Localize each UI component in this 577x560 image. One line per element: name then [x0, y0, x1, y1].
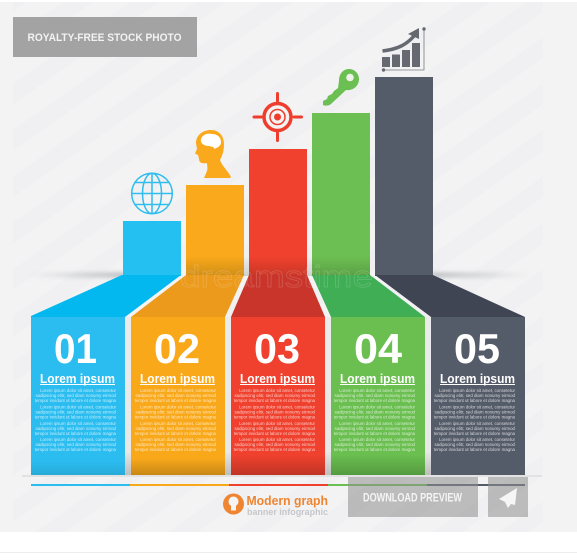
button: send: [488, 477, 528, 517]
body text 01: Lorem ipsum dolor sit amet, consetetur: [40, 421, 117, 426]
ribbon 1: [31, 275, 181, 317]
body text 01: tempor invidunt ut labore et dolore magna: [35, 447, 117, 452]
panel 04: [331, 317, 425, 475]
heading 03: Lorem ipsum: [240, 372, 315, 386]
body text 01: Lorem ipsum dolor sit amet, consetetur: [40, 404, 117, 410]
icon: target: [254, 94, 302, 140]
bar 2: [186, 185, 244, 276]
body text 05: sadipscing elitr, sed diam nonumy eirmod: [434, 442, 516, 447]
body text 02: tempor invidunt ut labore et dolore magna: [135, 398, 217, 403]
body text 03: sadipscing elitr, sed diam nonumy eirmod: [234, 410, 316, 414]
body text 04: [334, 388, 416, 452]
body text 04: Lorem ipsum dolor sit amet, consetetur: [339, 437, 416, 442]
heading 04: Lorem ipsum: [340, 372, 415, 386]
bar 5: [375, 77, 433, 276]
number 04: 04: [354, 325, 403, 372]
body text 05: tempor invidunt ut labore et dolore magna: [434, 431, 516, 436]
icon: paper plane: [499, 488, 517, 508]
ribbon 2: [131, 275, 244, 317]
perspective ribbons: [31, 275, 525, 317]
body text 01: sadipscing elitr, sed diam nonumy eirmod: [35, 442, 117, 447]
button: download preview: DOWNLOAD PREVIEW: [363, 490, 463, 504]
body text 05: [434, 388, 516, 452]
body text 05: tempor invidunt ut labore et dolore magna: [434, 447, 516, 452]
number 02: 02: [154, 325, 200, 372]
body text 03: Lorem ipsum dolor sit amet, consetetur: [239, 421, 316, 426]
step bars: [123, 77, 433, 276]
body text 03: tempor invidunt ut labore et dolore magna: [234, 414, 316, 420]
body text 01: sadipscing elitr, sed diam nonumy eirmod: [35, 410, 117, 414]
body text 04: sadipscing elitr, sed diam nonumy eirmod: [334, 426, 416, 431]
body text 03: sadipscing elitr, sed diam nonumy eirmod: [234, 442, 316, 447]
body text 05: Lorem ipsum dolor sit amet, consetetur: [439, 388, 516, 393]
icon: light bulb: [223, 494, 244, 514]
body text 02: tempor invidunt ut labore et dolore magna: [135, 414, 217, 420]
body text 05: tempor invidunt ut labore et dolore magna: [434, 414, 516, 420]
bar 1: [123, 221, 181, 276]
body text 04: Lorem ipsum dolor sit amet, consetetur: [339, 388, 416, 393]
ribbon 3: [231, 275, 325, 317]
number 03: 03: [254, 325, 300, 372]
body text 05: Lorem ipsum dolor sit amet, consetetur: [439, 437, 516, 442]
body text 01: [35, 388, 117, 452]
body text 04: Lorem ipsum dolor sit amet, consetetur: [339, 421, 416, 426]
body text 01: tempor invidunt ut labore et dolore magna: [35, 398, 117, 403]
body text 05: tempor invidunt ut labore et dolore magna: [434, 398, 516, 403]
panel gaps: [125, 317, 431, 475]
body text 03: Lorem ipsum dolor sit amet, consetetur: [239, 437, 316, 442]
body text 03: sadipscing elitr, sed diam nonumy eirmod: [234, 426, 316, 431]
watermark: dreamstime: [180, 259, 373, 294]
body text 01: sadipscing elitr, sed diam nonumy eirmod: [35, 426, 117, 431]
bar 4: [312, 113, 370, 276]
body text 02: Lorem ipsum dolor sit amet, consetetur: [140, 388, 217, 393]
number 01: 01: [54, 325, 97, 372]
ribbon 4: [312, 275, 425, 317]
heading 05: Lorem ipsum: [440, 372, 515, 386]
body text 02: [135, 388, 217, 452]
body text 01: Lorem ipsum dolor sit amet, consetetur: [40, 388, 117, 393]
body text 04: sadipscing elitr, sed diam nonumy eirmod: [334, 410, 416, 414]
body text 04: sadipscing elitr, sed diam nonumy eirmod: [334, 442, 416, 447]
body text 01: tempor invidunt ut labore et dolore magna: [35, 414, 117, 420]
body text 01: tempor invidunt ut labore et dolore magna: [35, 431, 117, 436]
body text 02: tempor invidunt ut labore et dolore magna: [135, 431, 217, 436]
badge: royalty-free: [13, 17, 197, 57]
floor shadows: [25, 273, 532, 277]
logo subtitle: banner infographic: [247, 507, 328, 517]
body text 05: Lorem ipsum dolor sit amet, consetetur: [439, 421, 516, 426]
icon: head with brain: [195, 130, 231, 178]
body text 04: sadipscing elitr, sed diam nonumy eirmod: [334, 393, 416, 398]
body text 04: tempor invidunt ut labore et dolore magna: [334, 447, 416, 452]
body text 03: tempor invidunt ut labore et dolore magna: [234, 398, 316, 403]
body text 03: tempor invidunt ut labore et dolore magna: [234, 431, 316, 436]
bar 3: [249, 149, 307, 276]
panel base shadow: [22, 475, 542, 477]
bar base shading: [186, 256, 370, 276]
body text 02: sadipscing elitr, sed diam nonumy eirmod: [135, 393, 217, 398]
body text 03: [234, 388, 316, 452]
panel 05: [431, 317, 525, 475]
body text 04: tempor invidunt ut labore et dolore magna: [334, 414, 416, 420]
ribbon 5: [375, 275, 525, 317]
body text 02: Lorem ipsum dolor sit amet, consetetur: [140, 404, 217, 410]
body text 02: sadipscing elitr, sed diam nonumy eirmod: [135, 442, 217, 447]
heading 02: Lorem ipsum: [140, 372, 215, 386]
heading 01: Lorem ipsum: [40, 372, 115, 386]
body text 03: Lorem ipsum dolor sit amet, consetetur: [239, 388, 316, 393]
body text 05: sadipscing elitr, sed diam nonumy eirmod: [434, 410, 516, 414]
body text 03: tempor invidunt ut labore et dolore magna: [234, 447, 316, 452]
icon: globe: [132, 173, 172, 214]
body text 01: Lorem ipsum dolor sit amet, consetetur: [40, 437, 117, 442]
body text 05: Lorem ipsum dolor sit amet, consetetur: [439, 404, 516, 410]
button: download preview: [348, 477, 478, 517]
panel 01: [31, 317, 125, 475]
body text 02: sadipscing elitr, sed diam nonumy eirmod: [135, 426, 217, 431]
logo title: Modern graph: [246, 493, 328, 508]
body text 01: sadipscing elitr, sed diam nonumy eirmod: [35, 393, 117, 398]
logo: [223, 493, 328, 517]
body text 02: sadipscing elitr, sed diam nonumy eirmod: [135, 410, 217, 414]
body text 03: sadipscing elitr, sed diam nonumy eirmod: [234, 393, 316, 398]
number 05: 05: [454, 325, 500, 372]
body text 04: tempor invidunt ut labore et dolore magna: [334, 431, 416, 436]
body text 02: Lorem ipsum dolor sit amet, consetetur: [140, 421, 217, 426]
colour rule: [31, 484, 525, 486]
body text 02: tempor invidunt ut labore et dolore magna: [135, 447, 217, 452]
panel 03: [231, 317, 325, 475]
body text 03: Lorem ipsum dolor sit amet, consetetur: [239, 404, 316, 410]
icon: key: [323, 69, 359, 106]
icon: growth chart: [382, 27, 426, 72]
body text 04: tempor invidunt ut labore et dolore magna: [334, 398, 416, 403]
body text 05: sadipscing elitr, sed diam nonumy eirmod: [434, 426, 516, 431]
body text 02: Lorem ipsum dolor sit amet, consetetur: [140, 437, 217, 442]
body text 04: Lorem ipsum dolor sit amet, consetetur: [339, 404, 416, 410]
badge: royalty-free: ROYALTY-FREE STOCK PHOTO: [28, 32, 182, 44]
panel 02: [131, 317, 225, 475]
body text 05: sadipscing elitr, sed diam nonumy eirmod: [434, 393, 516, 398]
